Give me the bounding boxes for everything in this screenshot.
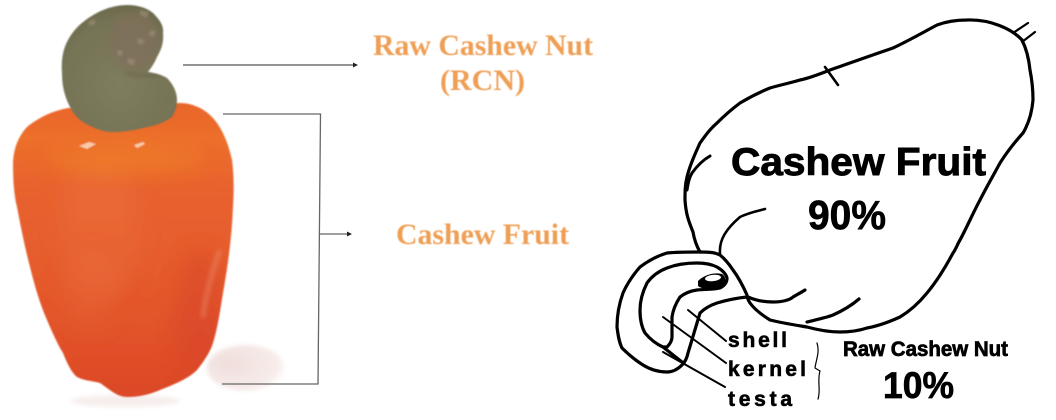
bracket: cashew fruit connector: [222, 114, 352, 384]
heading: Raw Cashew Nut: Raw Cashew Nut: [843, 338, 1008, 361]
fruit shadow: [70, 345, 285, 407]
label: Raw Cashew Nut (RCN): (RCN): [440, 64, 525, 97]
label: Cashew Fruit: Cashew Fruit: [396, 218, 569, 251]
nut outer shell: [617, 252, 747, 372]
heading: Cashew Fruit: Cashew Fruit: [731, 141, 986, 184]
value: 10%: 10%: [883, 365, 954, 406]
kernel cavity: [698, 273, 725, 289]
label: Raw Cashew Nut (RCN): Raw Cashew Nut: [373, 29, 593, 62]
fruit ridge ticks: [825, 67, 838, 85]
brace: [815, 343, 820, 399]
value: 90%: 90%: [808, 192, 886, 238]
label: Raw Cashew Nut (RCN): [373, 29, 593, 97]
label: shell: shell: [728, 329, 787, 352]
leader lines: [663, 310, 726, 387]
label: kernel: kernel: [728, 358, 806, 381]
photo: cashew apple with nut: [0, 0, 285, 407]
fruit outline: [685, 20, 1022, 252]
fruit creases: [720, 209, 765, 253]
diagram: cashew fruit and nut line drawing: [617, 20, 1035, 399]
raw cashew nut: [60, 4, 178, 133]
arrow: nut label connector: [183, 62, 358, 68]
cashew apple: [12, 102, 235, 398]
nut inner shell: [640, 263, 727, 362]
label: testa: testa: [728, 388, 792, 411]
